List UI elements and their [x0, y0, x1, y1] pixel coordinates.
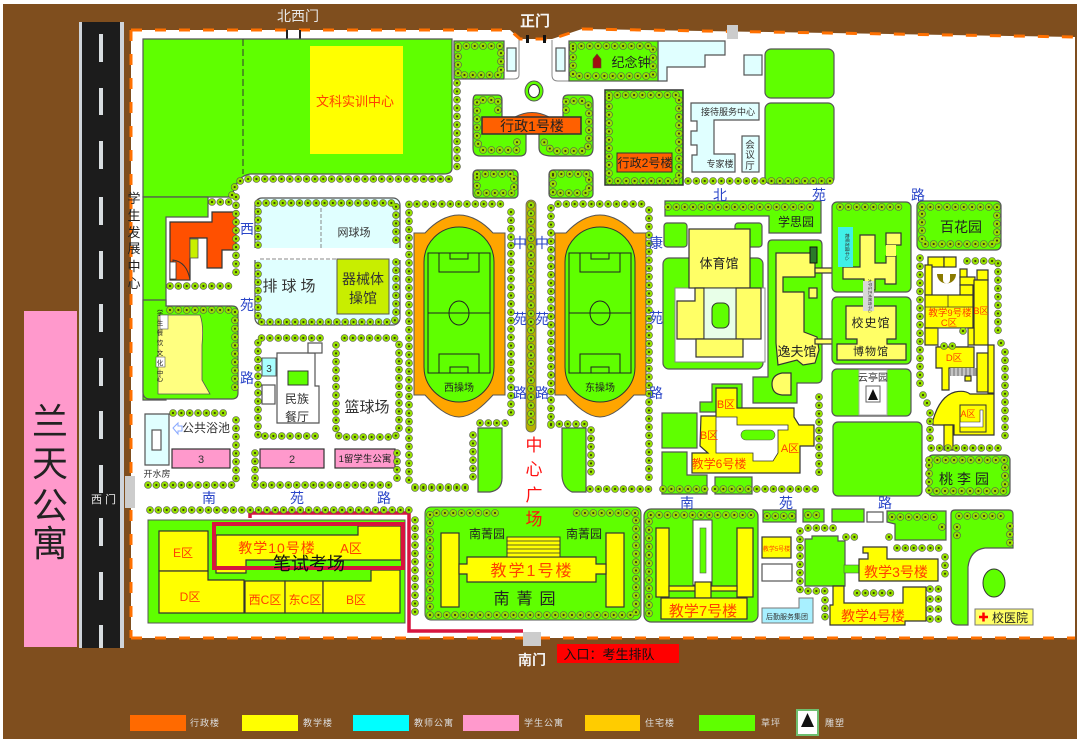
panel: 南菁园 and 教学1号楼: 南菁园: [493, 590, 563, 608]
panel: 云亭园 with sculpture: [832, 369, 911, 416]
panel: 接待服务中心 and 专家楼 and 会议厅: 会: [745, 139, 755, 151]
legend: 草坪: [761, 717, 781, 728]
road labels: 北苑路: 路: [911, 187, 925, 203]
gates: 北西门: [277, 8, 319, 24]
panel: 教学4号楼: 教学4号楼: [841, 608, 905, 624]
road labels: 南苑路 east: 南: [680, 495, 694, 511]
panel: 教学10号楼 exam venue: A区: [340, 541, 362, 556]
northeast lawns: [744, 49, 834, 184]
panel: 学生发展中心: 心: [127, 276, 141, 291]
panel: 学生餐饮文化中心: 餐: [157, 328, 164, 337]
panel: 行政1号楼: 行政1号楼: [500, 118, 564, 134]
panel: sports courts: 排球场: [262, 278, 320, 295]
panel: northwest lawn and 文科实训中心: [143, 39, 452, 197]
panel: 行政2号楼: 行政2号楼: [618, 155, 672, 170]
panel: 行政1号楼: [473, 95, 593, 156]
legend: 住宅楼: [645, 717, 675, 728]
panel: 教学10号楼 exam venue: 东C区: [289, 593, 321, 607]
panel: 南菁园 and 教学1号楼: [425, 507, 641, 620]
road labels: 康苑路: 康: [649, 235, 663, 251]
central strip lawn: [526, 200, 536, 432]
legend: 教师公寓: [414, 717, 454, 728]
panel: 接待服务中心 and 专家楼 and 会议厅: [691, 103, 759, 172]
label: 篮球场: 篮球场: [344, 398, 390, 416]
panel: 接待服务中心 and 专家楼 and 会议厅: 专家楼: [706, 158, 734, 169]
panel: 教学9号楼: C区: [941, 318, 958, 329]
panel: 南菁园 and 教学1号楼: 教学1号楼: [491, 562, 573, 580]
label: 中心广场: 广: [526, 486, 542, 505]
panel: 教学3号楼: 教学3号楼: [864, 564, 928, 580]
building: 兰天公寓: 公: [32, 485, 68, 526]
panel: 校史馆 博物馆: 校史馆: [851, 315, 891, 330]
panel: 学生餐饮文化中心: 生: [157, 318, 164, 327]
panel: sports courts: 网球场: [338, 225, 370, 239]
label: 中心广场: 场: [526, 510, 542, 529]
panel: 学生餐饮文化中心: [143, 300, 238, 399]
legend: 行政楼: [190, 717, 220, 728]
gates: 南门: [518, 652, 546, 668]
panel: 教学6号楼: 教学6号楼: [692, 456, 746, 471]
panel: 校史馆 博物馆: 大学生艺术教育中心: [868, 279, 872, 313]
gates: [91, 8, 738, 668]
label: 中心广场: [526, 436, 542, 529]
panel: 教学9号楼: D区: [946, 353, 963, 364]
panel: 教学10号楼 exam venue: 西C区: [249, 593, 281, 607]
road labels: 西苑路: 路: [240, 370, 254, 386]
panel: 教学9号楼: [925, 257, 994, 450]
panel: 校史馆 博物馆: 博物馆: [853, 344, 889, 358]
panel: sports courts: 器械体: [342, 271, 384, 287]
legend: 教学楼: [303, 717, 333, 728]
panel: 学生餐饮文化中心: 学: [157, 308, 164, 317]
panel: 体育馆: [663, 223, 765, 369]
panel: 接待服务中心 and 专家楼 and 会议厅: 厅: [745, 161, 755, 172]
road labels: 南苑路 west: 路: [377, 490, 391, 506]
chart: west sports field: [414, 215, 505, 417]
student dorms 1 2 3: 3: [198, 454, 204, 466]
panel: 公共浴池 and 开水房: [143, 414, 230, 479]
legend: 学生公寓: [524, 717, 564, 728]
panel: 教学6号楼: A区: [781, 443, 799, 455]
student dorms 1 2 3: [172, 449, 395, 468]
panel: 教学6号楼: B区: [717, 399, 735, 411]
road labels: 西苑路: 苑: [240, 297, 254, 313]
chart: east sports field: [555, 215, 646, 417]
panel: 学生发展中心: 中: [127, 259, 141, 274]
panel: 百花园: 百花园: [940, 219, 982, 235]
panel: 学思园: [665, 201, 821, 233]
building: 兰天公寓: 寓: [32, 523, 68, 564]
panel: 民族餐厅: 民族: [285, 392, 309, 406]
panel: 学生发展中心: 展: [127, 241, 141, 256]
panel: 南菁园 and 教学1号楼: 南菁园: [566, 526, 602, 541]
road: west highway: [79, 22, 124, 648]
panel: 教学10号楼 exam venue: 教学10号楼: [238, 540, 316, 556]
building: 兰天公寓: 兰: [32, 401, 68, 442]
panel: 逸夫馆: 逸夫馆: [777, 344, 817, 359]
panel: 学生发展中心: [127, 191, 236, 400]
road labels: 中苑路: 中: [513, 235, 527, 251]
panel: 学生餐饮文化中心: 中: [157, 368, 163, 377]
panel: 体育馆: 体育馆: [699, 256, 739, 271]
label: 中心广场: 心: [526, 460, 542, 479]
road labels: 康苑路: [649, 235, 663, 401]
panel: 桃李园: 桃李园: [939, 471, 993, 487]
small lawns north of plaza: [473, 170, 593, 198]
building: 兰天公寓: [24, 311, 77, 647]
road labels: 南苑路 west: 南: [202, 490, 216, 506]
student dorms 1 2 3: 1留学生公寓: [339, 453, 391, 465]
panel: 学生发展中心: 学: [127, 191, 141, 206]
panel: 教学6号楼: B区: [700, 430, 718, 442]
red route from south gate to exam venue: [250, 513, 523, 631]
panel: 教学10号楼 exam venue: [148, 520, 405, 623]
panel: 民族餐厅: 3: [266, 364, 272, 375]
student dorms 1 2 3: 2: [289, 454, 295, 466]
panel: 行政2号楼: [605, 90, 683, 185]
legend: 雕塑: [825, 717, 845, 728]
panel: 学思园: 学思园: [778, 214, 814, 229]
north gate entry blocks: [454, 40, 569, 101]
panel: 学生发展中心: 发: [127, 225, 141, 240]
panel: 教学5号楼 and 后勤服务集团: 后勤服务集团: [766, 612, 808, 621]
road labels: 康苑路: 苑: [649, 310, 663, 326]
panel: 逸夫馆: [753, 240, 857, 403]
panel: 民族餐厅: 餐厅: [285, 409, 309, 424]
road labels: 南苑路 west: 苑: [290, 490, 304, 506]
road labels: 北苑路: 北: [713, 187, 727, 203]
south-east lawn patches: [763, 509, 946, 586]
panel: 云亭园 with sculpture: 云亭园: [858, 371, 888, 384]
panel: sports courts: 操馆: [349, 290, 377, 306]
panel: 百花园: [917, 201, 1001, 250]
panel: 公共浴池 and 开水房: 开水房: [143, 468, 171, 479]
label: 中心广场: 中: [526, 436, 542, 455]
panel: 纪念钟: 纪念钟: [611, 55, 651, 70]
road labels: 北苑路: [713, 187, 925, 203]
panel: 南菁园 and 教学1号楼: 南菁园: [469, 526, 505, 541]
gates: 正门: [520, 12, 550, 30]
panel: 教学4号楼: [830, 586, 926, 625]
panel: 教学5号楼 and 后勤服务集团: 教学5号楼: [763, 545, 790, 553]
panel: 学生发展中心: 生: [127, 208, 141, 223]
road labels: 中苑路: 中: [535, 235, 549, 251]
panel: 教学5号楼 and 后勤服务集团: [762, 537, 813, 623]
panel: 教学10号楼 exam venue: D区: [180, 590, 200, 604]
panel: 学生餐饮文化中心: 文: [157, 348, 164, 357]
road labels: 北苑路: 苑: [812, 187, 826, 203]
panel: 教学10号楼 exam venue: E区: [173, 546, 193, 560]
campus white ground with orange dashed boundary: [131, 29, 1075, 638]
callout: entrance queue: [557, 644, 679, 663]
road labels: 中苑路: 路: [513, 385, 527, 401]
road labels: 康苑路: 路: [649, 385, 663, 401]
panel: northwest lawn and 文科实训中心: 文科实训中心: [316, 94, 394, 109]
panel: 桃李园: [928, 455, 1010, 496]
panel: 教学10号楼 exam venue: 笔试考场: [273, 554, 345, 574]
panel: 教学9号楼: 教学9号楼: [928, 307, 972, 319]
road labels: 西苑路: [240, 221, 254, 386]
panel: 纪念钟: [569, 41, 725, 81]
panel: 教学7号楼: 教学7号楼: [669, 603, 737, 620]
panel: 教学3号楼: [859, 547, 938, 581]
panel: 学生餐饮文化中心: 心: [157, 375, 164, 383]
panel: 教学9号楼: A区: [960, 409, 976, 419]
road labels: 中苑路: [513, 235, 549, 401]
panel: 校史馆 博物馆: [832, 279, 911, 364]
chart: west sports field: 西操场: [444, 381, 474, 394]
lawn patches south of fields: [478, 428, 586, 492]
gates: 西门: [91, 492, 119, 506]
callout: entrance queue: 入口：考生排队: [563, 647, 655, 662]
road labels: 南苑路 east: 苑: [779, 495, 793, 511]
panel: 教学10号楼 exam venue: B区: [346, 593, 366, 607]
road labels: 中苑路: 路: [535, 385, 549, 401]
panel: sports courts: [253, 198, 403, 325]
tree rows: [148, 46, 1010, 620]
road labels: 中苑路: 苑: [513, 311, 527, 327]
road labels: 南苑路 west: [202, 490, 391, 506]
road labels: 南苑路 east: [680, 495, 892, 511]
building: 兰天公寓: 天: [32, 443, 68, 484]
chart: east sports field: 东操场: [585, 381, 615, 394]
panel: 教学7号楼: [644, 509, 758, 622]
legend: [130, 710, 845, 735]
panel: 学生餐饮文化中心: 饮: [157, 338, 164, 347]
panel: 教学6号楼: [662, 384, 814, 494]
panel: 校医院: [951, 510, 1033, 625]
road labels: 西苑路: 西: [240, 221, 254, 237]
panel: 公共浴池 and 开水房: 公共浴池: [182, 421, 230, 435]
panel: 民族餐厅: [262, 343, 322, 424]
panel: 校医院: 校医院: [992, 610, 1028, 625]
road labels: 中苑路: 苑: [535, 311, 549, 327]
large east lawn: [833, 422, 922, 496]
road labels: 南苑路 east: 路: [878, 495, 892, 511]
panel: 教师发展中心 lawn block: 教师发展中心: [844, 234, 850, 261]
panel: 接待服务中心 and 专家楼 and 会议厅: 议: [745, 150, 755, 161]
panel: 学生餐饮文化中心: 化: [157, 358, 164, 367]
panel: 接待服务中心 and 专家楼 and 会议厅: 接待服务中心: [701, 106, 755, 117]
panel: 教师发展中心 lawn block: [832, 202, 911, 292]
panel: 教学9号楼: B区: [973, 306, 989, 316]
